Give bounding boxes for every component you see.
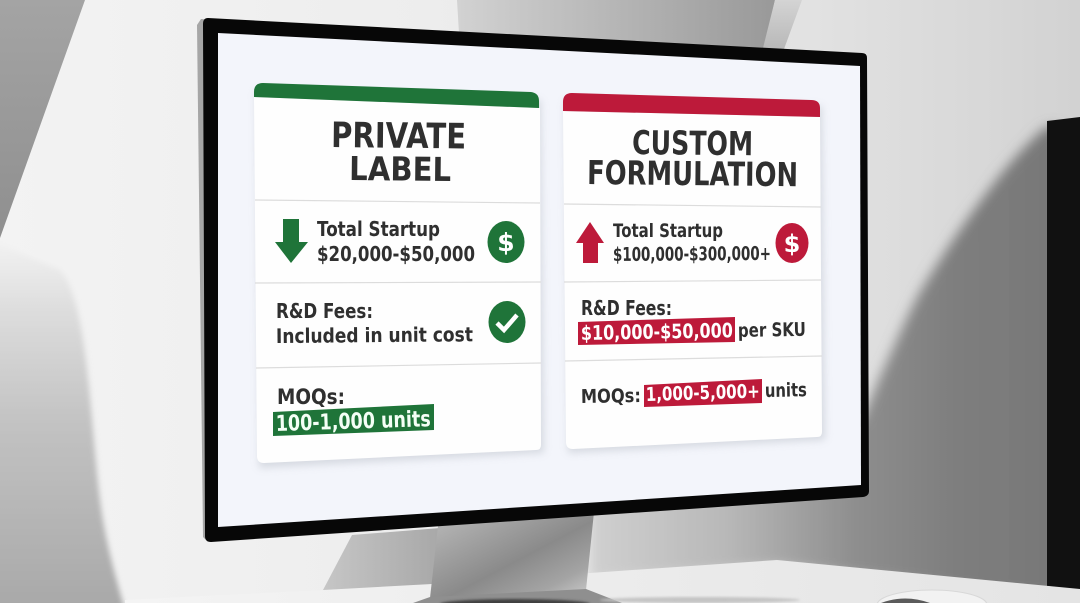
total startup text <box>317 217 475 266</box>
MOQ text: MOQs: <box>581 385 641 408</box>
heading: private label: LABEL <box>349 149 451 189</box>
mouse <box>600 590 987 603</box>
screen <box>218 33 861 527</box>
green header bar <box>254 83 539 108</box>
highlight: unit range: 100-1,000 units <box>275 407 431 437</box>
heading: private label <box>331 116 466 189</box>
total startup text: $100,000-$300,000+ <box>613 243 771 266</box>
desk surface <box>125 560 1080 603</box>
silver side edge <box>197 19 214 542</box>
monitor stand <box>413 512 622 603</box>
R&D fees text: R&D Fees: <box>276 299 373 323</box>
highlight: fee range: $10,000-$50,000 <box>581 318 733 345</box>
monitor cast shadow <box>323 528 440 590</box>
icon: dollar circle <box>776 223 808 263</box>
icon: dollar circle <box>488 221 524 263</box>
icon: dollar circle: $ <box>784 230 800 258</box>
total startup text: $20,000-$50,000 <box>317 242 475 266</box>
shadow: right card <box>565 100 825 453</box>
heading: private label: PRIVATE <box>331 116 466 157</box>
MOQ text: units <box>765 379 807 402</box>
R&D fees text <box>276 299 473 348</box>
panel: private label <box>254 83 541 463</box>
R&D fees text: R&D Fees: <box>581 296 672 320</box>
heading: custom formulation <box>587 123 798 194</box>
red header bar <box>563 93 820 117</box>
icon: check circle <box>488 301 526 343</box>
R&D fees text <box>578 296 806 345</box>
shadow: left card <box>256 90 544 468</box>
highlight: unit range: 1,000-5,000+ <box>645 380 760 406</box>
icon: up arrow <box>576 222 604 263</box>
MOQ text <box>273 385 434 437</box>
dark side panel <box>1047 117 1080 590</box>
black bezel <box>203 18 869 542</box>
total startup text: Total Startup <box>613 220 723 242</box>
MOQ text: MOQs: <box>277 385 345 409</box>
total startup text: Total Startup <box>317 217 440 241</box>
monitor <box>197 18 869 542</box>
R&D fees text: per SKU <box>738 319 806 342</box>
icon: dollar circle: $ <box>497 228 515 257</box>
heading: custom formulation: CUSTOM <box>632 123 753 163</box>
panel: custom formulation <box>563 93 822 449</box>
icon: down arrow <box>275 219 308 263</box>
R&D fees text: Included in unit cost <box>276 322 473 348</box>
MOQ text <box>581 379 807 408</box>
heading: custom formulation: FORMULATION <box>587 153 798 194</box>
total startup text <box>613 220 771 266</box>
row dividers <box>564 204 822 361</box>
row dividers <box>255 200 541 368</box>
